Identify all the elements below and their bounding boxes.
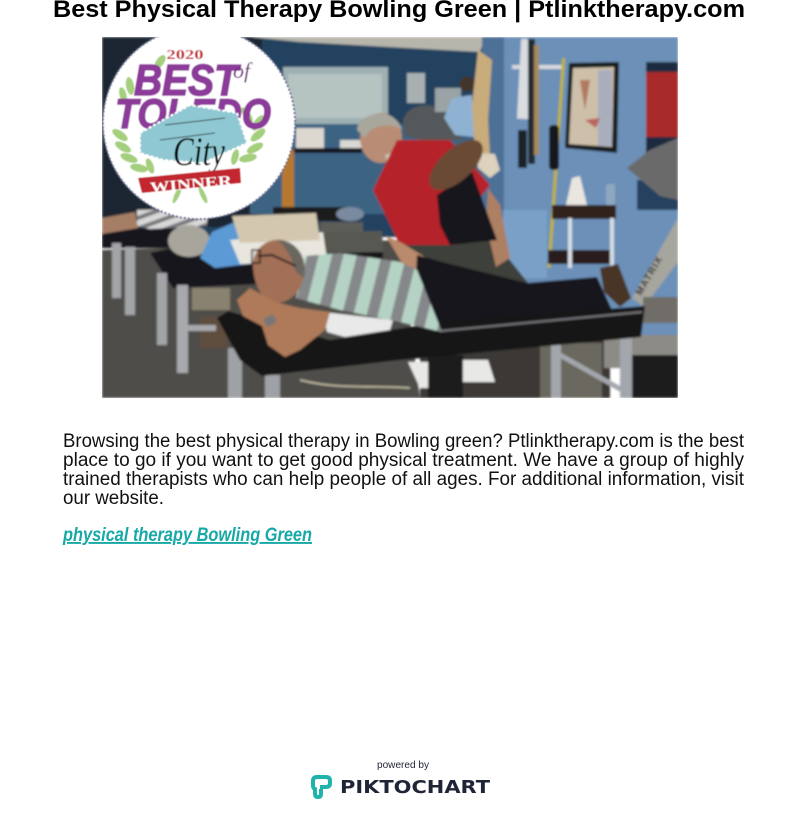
- photo: physical therapy clinic: [102, 27, 678, 398]
- powered by label: powered by: [377, 760, 429, 771]
- supply cart: [566, 176, 587, 205]
- paragraph line 2: place to go if you want to get good physical treatment. We have a group of highly: [63, 450, 745, 471]
- of: of: [233, 58, 253, 83]
- treadmill: [627, 138, 678, 200]
- spine model: [472, 50, 492, 155]
- therapist pants: [404, 239, 528, 285]
- raised leg: [437, 172, 497, 245]
- paragraph line 4: our website.: [63, 488, 164, 509]
- front table legs: [228, 348, 242, 398]
- TOLEDO: TOLEDO: [115, 90, 271, 137]
- wall rods: [512, 65, 564, 69]
- back table and patient: [102, 228, 177, 248]
- face mask: [140, 105, 247, 163]
- window: [283, 67, 388, 124]
- floor: [102, 240, 420, 398]
- photo: physical therapy clinic: MATRIX: [634, 254, 665, 298]
- pillow: [323, 312, 393, 337]
- therapist head: [360, 113, 402, 163]
- link: physical therapy Bowling Green: [62, 525, 312, 546]
- shelf: [296, 128, 324, 148]
- City Paper logo: City: [173, 129, 225, 174]
- WINNER: WINNER: [149, 173, 233, 196]
- laurel wreath: [110, 53, 267, 204]
- front table: [217, 306, 645, 376]
- patient head: [253, 240, 304, 303]
- back wall: [136, 37, 484, 239]
- 2020: 2020: [166, 48, 204, 63]
- striped shirt: [296, 253, 442, 332]
- Matrix treadmill rail: [632, 218, 678, 307]
- therapist arms: [384, 234, 426, 270]
- wall chart: [565, 62, 619, 153]
- therapist shoes: [408, 362, 433, 388]
- Ohio State poster: [646, 62, 678, 170]
- winner banner: [138, 168, 241, 193]
- paragraph line 3: trained therapists who can help people of all ages. For additional information, visit: [63, 469, 745, 490]
- patient arms: [237, 288, 330, 357]
- treadmill and person in background: [403, 105, 463, 140]
- middle patient: [168, 225, 210, 257]
- raised shoe: [428, 138, 484, 192]
- Piktochart wordmark: PIKTOCHART: [340, 778, 490, 798]
- front patient legs: [415, 254, 612, 324]
- icon: Piktochart logo mark: [313, 777, 330, 797]
- therapist red shirt: [373, 140, 490, 245]
- middle table: [150, 248, 383, 288]
- paragraph line 1: Browsing the best physical therapy in Bowling green? Ptlinktherapy.com is the best: [63, 431, 745, 452]
- BEST: BEST: [134, 56, 241, 105]
- items under tables: [192, 288, 230, 310]
- paragraph: [63, 431, 745, 509]
- right wall: [502, 37, 678, 336]
- badge: Best of Toledo 2020 winner: [103, 27, 295, 219]
- badge disc: [103, 27, 295, 219]
